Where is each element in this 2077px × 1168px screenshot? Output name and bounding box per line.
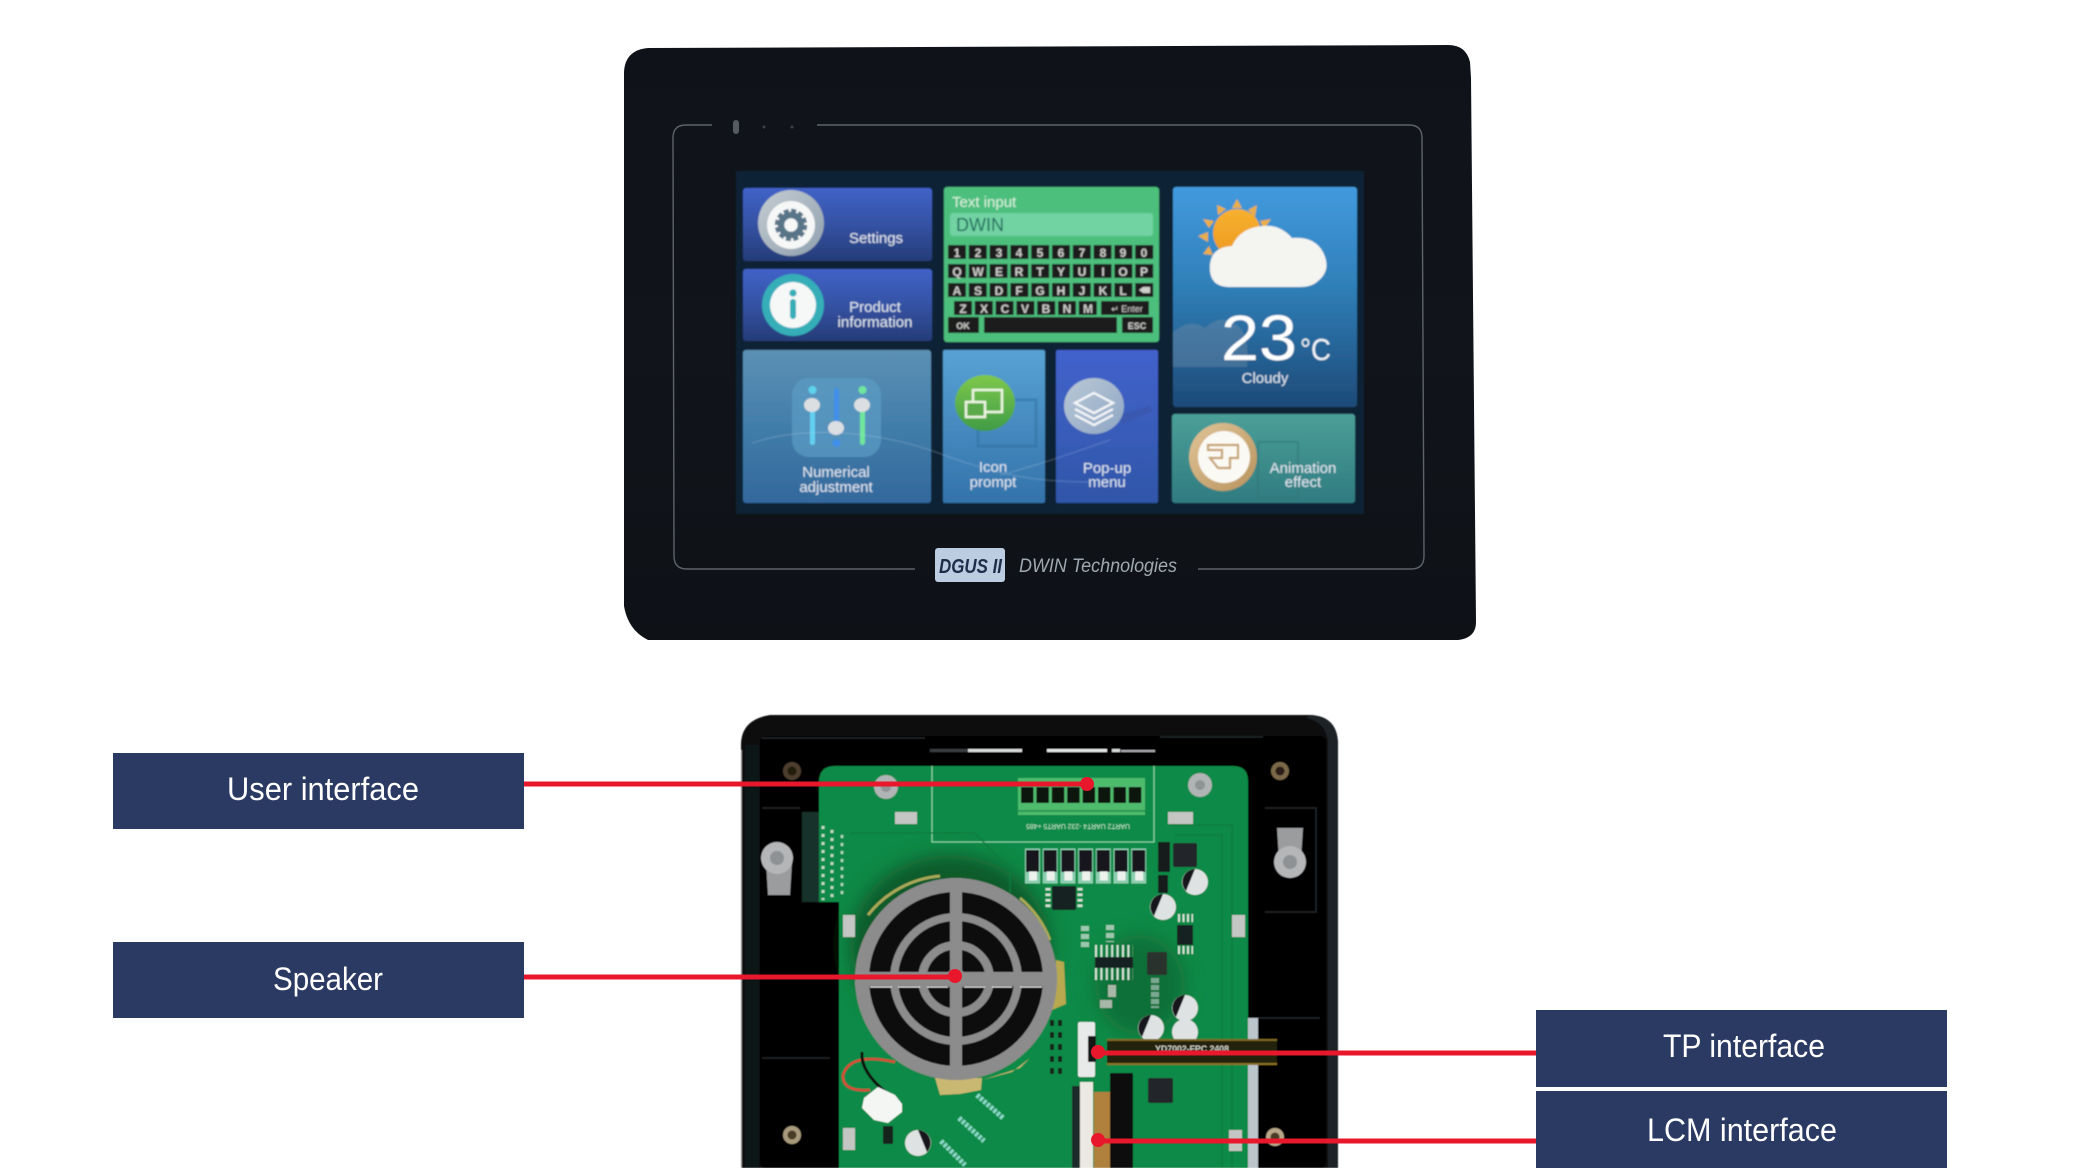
tile: product information — [743, 269, 932, 341]
backspace key symbol — [1139, 287, 1150, 293]
bracket and screw right — [1274, 828, 1306, 878]
tile: text input keyboard: Text input — [952, 194, 1017, 211]
tile: numerical adjustment — [743, 350, 931, 503]
tile: weather: °C — [1300, 332, 1331, 367]
outlined connector area — [932, 766, 1154, 842]
label: speaker — [113, 942, 524, 1018]
logo: DGUS II badge: DGUS II — [939, 556, 1002, 578]
sun with rays — [1198, 199, 1271, 257]
board screw right — [1188, 773, 1212, 797]
decorative wave across tiles — [752, 433, 1110, 482]
tile: animation effect — [1172, 414, 1355, 503]
screen background — [736, 171, 1364, 514]
grille highlights — [870, 986, 1042, 988]
green terminal block — [1018, 778, 1145, 815]
LED bead rows — [941, 1095, 1003, 1165]
board components upper right — [1048, 842, 1197, 1075]
keyboard keys — [948, 252, 1155, 333]
interior wall details — [762, 737, 1320, 1058]
logo: DGUS II badge — [935, 548, 1005, 582]
speaker — [843, 876, 1066, 1123]
green circuit board — [819, 766, 1248, 1168]
keyboard labels: ZXCVBNM — [959, 302, 1093, 316]
keyboard labels — [952, 246, 1148, 331]
speaker wires — [843, 1059, 895, 1090]
board shadow — [850, 855, 1050, 1035]
leader line: TP interface — [1091, 1045, 1536, 1059]
LCM connector — [1072, 1073, 1133, 1168]
label: TP interface — [1536, 1010, 1947, 1087]
indicator lights — [733, 120, 794, 134]
brass insert top right — [1271, 762, 1289, 780]
left PCB tab — [802, 812, 820, 902]
housing — [741, 715, 1338, 1168]
housing left wall — [745, 745, 759, 1168]
keyboard labels: QWERTYUIOP — [952, 265, 1148, 279]
electrolytic capacitors — [883, 869, 1208, 1156]
tile: settings — [743, 188, 932, 261]
inductor lower right — [1148, 1078, 1173, 1103]
tile: icon prompt: prompt — [970, 474, 1017, 491]
leader line: LCM interface — [1091, 1133, 1536, 1147]
touch screen — [736, 171, 1364, 514]
FPC ribbon cable — [1107, 1039, 1277, 1065]
label: TP interface: TP interface — [1663, 1028, 1825, 1064]
top notch slits — [930, 749, 1155, 752]
white connector plug — [862, 1087, 902, 1123]
row of power transistors — [1025, 861, 1147, 876]
tile: pop-up menu: Pop-up — [1083, 460, 1131, 477]
silver strip behind board — [1246, 1018, 1258, 1168]
housing edge highlight — [740, 750, 742, 1168]
brass insert top left — [783, 762, 801, 780]
keyboard labels: ↵ Enter — [1111, 304, 1143, 314]
board screw left — [874, 775, 898, 799]
housing right edge — [1306, 715, 1338, 1168]
label: LCM interface: LCM interface — [1647, 1112, 1837, 1148]
panel: rear view of device interior — [741, 715, 1338, 1168]
cloud — [1210, 226, 1327, 287]
tile: numerical adjustment: Numerical — [802, 464, 870, 481]
label: LCM interface — [1536, 1091, 1947, 1168]
keyboard labels: ASDFGHJKL — [953, 284, 1127, 298]
tile: pop-up menu: menu — [1088, 474, 1126, 491]
tape around speaker — [935, 1078, 982, 1095]
tile: animation effect: Animation — [1270, 460, 1336, 477]
bracket and screw left — [761, 842, 793, 895]
leader line: user interface — [524, 777, 1094, 791]
leader line: speaker — [524, 969, 962, 983]
tile: icon prompt — [943, 350, 1045, 503]
tile: numerical adjustment: adjustment — [799, 479, 874, 496]
bezel inset outline — [673, 125, 1424, 569]
tile: product information: Product — [849, 299, 902, 316]
TP connector — [1078, 1022, 1096, 1077]
board shadow at right — [1095, 935, 1185, 1035]
label: user interface — [113, 753, 524, 829]
board traces — [850, 825, 1232, 1168]
panel: front view of display device — [624, 45, 1476, 640]
silkscreen labels: UART2 UART4 -232 UART5 +485 — [1026, 822, 1130, 829]
tile: animation effect: effect — [1285, 474, 1322, 491]
keyboard labels: OK — [956, 321, 970, 331]
speaker grille — [855, 878, 1057, 1080]
background clouds — [1173, 319, 1248, 367]
small parts at left edge of board — [823, 826, 842, 900]
label: user interface: User interface — [227, 771, 419, 807]
tile: product information: information — [838, 314, 912, 331]
brass insert bottom right — [1266, 1128, 1284, 1146]
tile: settings: Settings — [849, 230, 903, 247]
brass insert bottom left — [783, 1126, 801, 1144]
tile: weather: 23 — [1221, 302, 1297, 374]
tile: pop-up menu — [1056, 350, 1158, 503]
housing interior — [760, 736, 1326, 1168]
FPC ribbon cable: YD7002-FPC 2408 — [1155, 1044, 1229, 1054]
keyboard labels: ESC — [1128, 321, 1147, 331]
tile: text input keyboard — [944, 187, 1159, 342]
brand name: DWIN Technologies — [1019, 556, 1177, 577]
label: speaker: Speaker — [273, 961, 383, 997]
tile: text input keyboard: DWIN — [956, 215, 1004, 235]
board clips — [843, 812, 1245, 1151]
device bezel — [624, 45, 1476, 640]
keyboard labels: 1234567890 — [954, 246, 1148, 260]
tile: weather — [1173, 187, 1357, 407]
tile: icon prompt: Icon — [979, 459, 1007, 476]
tile: weather: Cloudy — [1242, 370, 1289, 387]
